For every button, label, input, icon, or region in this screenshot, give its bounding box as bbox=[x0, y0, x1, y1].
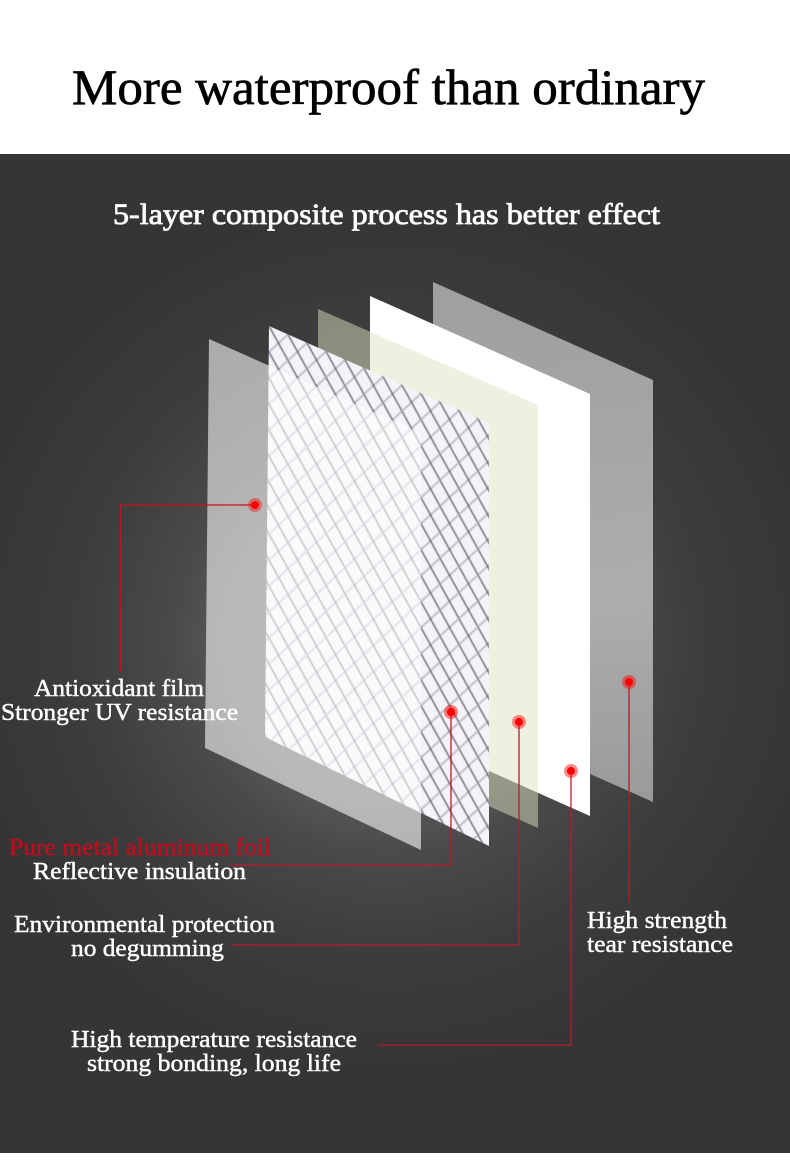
label: environmental protection: no degumming bbox=[71, 936, 224, 962]
label: high temperature: strong bonding, long life bbox=[87, 1051, 341, 1077]
label: aluminum foil: Reflective insulation bbox=[33, 859, 246, 885]
layer: aluminum foil bbox=[260, 320, 495, 850]
label: high temperature: High temperature resistance bbox=[71, 1027, 357, 1053]
label: high strength: High strength bbox=[587, 908, 727, 934]
callout line: environmental protection bbox=[232, 722, 519, 945]
callout line: high temperature bbox=[378, 771, 571, 1045]
layer: white film bbox=[370, 296, 590, 816]
label: environmental protection bbox=[14, 912, 275, 962]
dot: environmental protection bbox=[512, 715, 526, 729]
subtitle: 5-layer composite process has better effect bbox=[113, 198, 661, 231]
callout line: antioxidant film bbox=[120, 505, 255, 672]
label: antioxidant film bbox=[1, 676, 238, 726]
label: high strength: tear resistance bbox=[587, 932, 733, 958]
title: More waterproof than ordinary bbox=[72, 59, 705, 115]
label: aluminum foil bbox=[9, 835, 271, 885]
label: aluminum foil: Pure metal aluminum foil bbox=[9, 835, 271, 861]
callout line: high strength bbox=[628, 682, 630, 903]
dot: high temperature bbox=[564, 764, 578, 778]
layer: back grey film bbox=[433, 282, 653, 802]
label: environmental protection: Environmental protection bbox=[14, 912, 275, 938]
dot: high strength bbox=[622, 675, 636, 689]
layer: antioxidant film bbox=[205, 339, 421, 850]
dot: antioxidant film bbox=[248, 498, 262, 512]
layer: beige adhesive bbox=[318, 309, 538, 828]
label: antioxidant film: Antioxidant film bbox=[34, 676, 204, 702]
dot: aluminum foil bbox=[444, 705, 458, 719]
label: high temperature bbox=[71, 1027, 357, 1077]
label: high strength bbox=[587, 908, 733, 958]
callout line: aluminum foil bbox=[230, 712, 451, 865]
label: antioxidant film: Stronger UV resistance bbox=[1, 700, 238, 726]
layer diagram bbox=[205, 282, 653, 850]
